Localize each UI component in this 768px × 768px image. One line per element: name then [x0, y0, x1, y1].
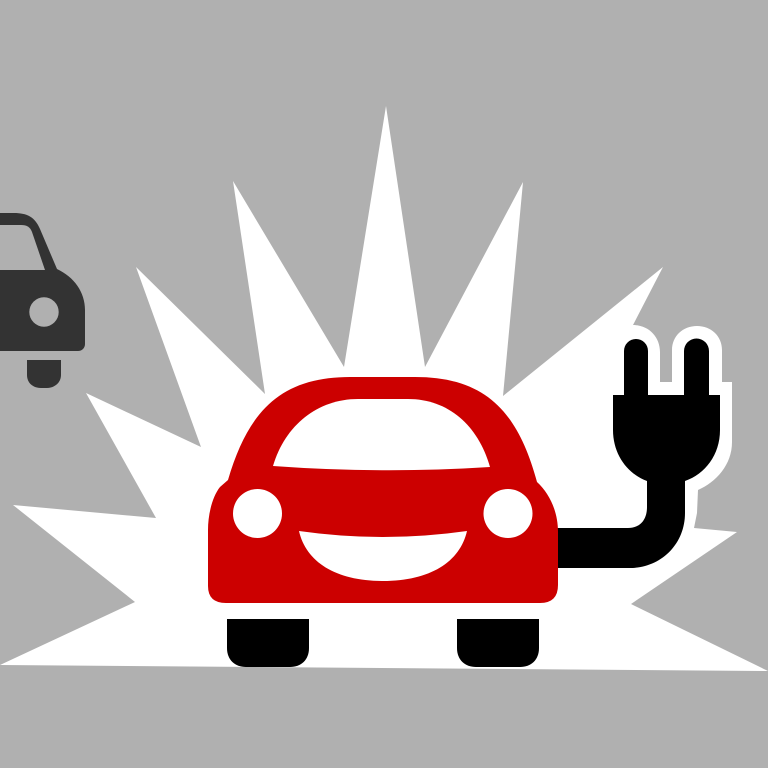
icon: partial grey car [0, 213, 85, 388]
icon: red car [208, 377, 558, 667]
right wheel [457, 619, 539, 667]
body [208, 377, 558, 603]
cable [556, 478, 685, 568]
right headlight [484, 489, 532, 538]
icon: plug with cable [556, 338, 720, 568]
plug body [613, 338, 720, 481]
left wheel [227, 619, 309, 667]
windshield [273, 399, 490, 470]
left headlight [233, 489, 282, 538]
smile [299, 531, 467, 581]
starburst with plug outline [0, 106, 768, 671]
